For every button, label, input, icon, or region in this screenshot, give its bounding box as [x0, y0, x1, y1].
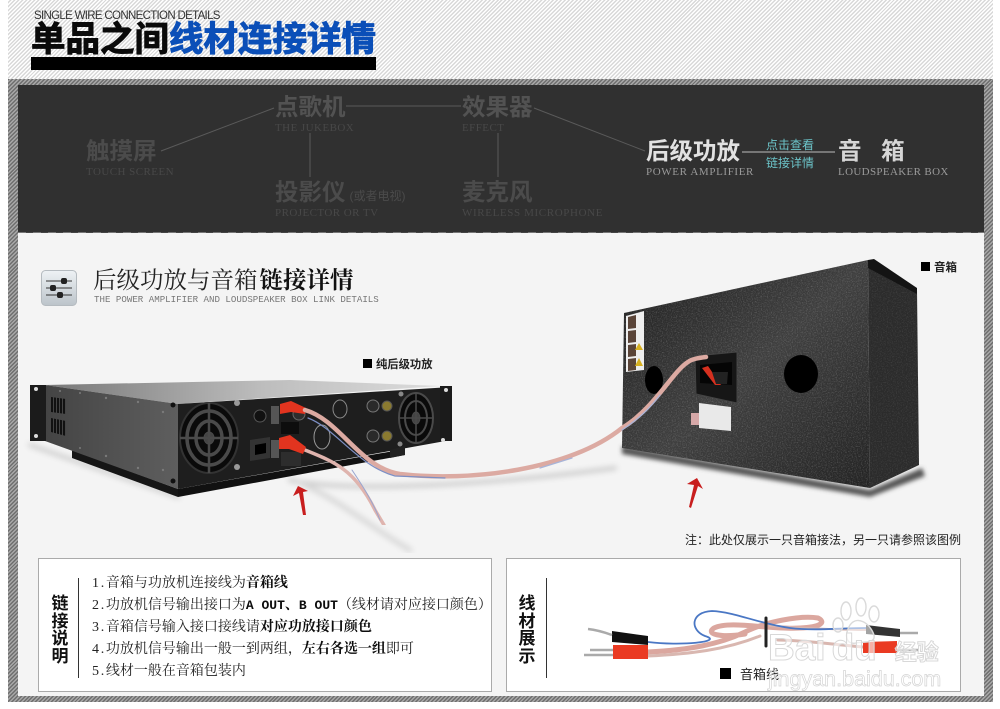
spec label — [699, 403, 731, 431]
node: jukebox — [275, 94, 354, 134]
speaker side — [868, 260, 919, 488]
node: microphone: 麦克风 — [462, 179, 532, 205]
amp back — [178, 387, 451, 489]
node: jukebox: 点歌机 — [275, 94, 346, 120]
cable caption: 音箱线 — [740, 667, 779, 682]
amp back details — [234, 392, 404, 470]
heading text: 后级功放与音箱链接详情 — [93, 268, 354, 294]
amp feet edge — [72, 450, 178, 497]
panel: connection notes — [38, 558, 492, 692]
note 4: 4.功放机信号输出一般一到两组，左右各选一组即可 — [92, 642, 414, 657]
node: effect: EFFECT — [462, 122, 504, 134]
amp side — [45, 385, 178, 489]
note 3: 3.音箱信号输入接口接线请对应功放接口颜色 — [92, 620, 372, 635]
section heading — [93, 268, 379, 305]
icon: sliders — [41, 270, 77, 306]
amp label: 纯后级功放 — [376, 359, 432, 371]
chain connector lines — [161, 106, 835, 177]
notes heading: 链接说明 — [52, 594, 68, 666]
link caption: 点击查看 — [766, 138, 814, 152]
node: jukebox: THE JUKEBOX — [275, 122, 354, 134]
amplifier photo — [30, 380, 452, 525]
node: touch screen: TOUCH SCREEN — [86, 166, 174, 178]
second amp wire — [305, 450, 384, 525]
arrow: amplifier — [293, 486, 308, 515]
note 1: 1.音箱与功放机连接线为音箱线 — [92, 576, 288, 591]
node: power amplifier: 后级功放 — [646, 138, 740, 164]
notes list — [92, 574, 492, 679]
warning sticker — [626, 311, 644, 372]
node: microphone: WIRELESS MICROPHONE — [462, 207, 603, 219]
cable caption — [720, 667, 779, 682]
node: projector: 投影仪 (或者电视) — [275, 179, 406, 205]
right fan — [399, 393, 433, 443]
node: projector — [275, 179, 406, 219]
main speaker cable — [302, 354, 708, 479]
header title: 单品之间线材连接详情 — [31, 21, 376, 59]
note 5: 5.线材一般在音箱包装内 — [92, 664, 246, 679]
speaker photo — [622, 259, 919, 488]
speaker label — [921, 261, 957, 274]
note: 注：此处仅展示一只音箱接法，另一只请参照该图例 — [685, 533, 961, 547]
node: loudspeaker box — [838, 138, 949, 178]
watermark logotype: Baidu 经验 — [768, 627, 939, 668]
terminal plate — [695, 352, 737, 403]
speaker label: 音箱 — [934, 262, 957, 274]
note 2: 2.功放机信号输出接口为A OUT、B OUT（线材请对应接口颜色） — [92, 598, 492, 613]
node: touch screen: 触摸屏 — [86, 138, 156, 164]
node: effect — [462, 94, 532, 134]
floor shadows — [28, 442, 928, 553]
display heading: 线材展示 — [518, 594, 536, 666]
panel: link details — [18, 233, 984, 696]
watermark paw — [832, 597, 880, 644]
cable photo — [584, 610, 918, 659]
link caption — [766, 138, 814, 170]
node: power amplifier — [646, 138, 754, 178]
red plugs — [280, 401, 306, 414]
panel: cable display — [506, 558, 961, 692]
link caption: 链接详情 — [766, 156, 814, 170]
speaker front — [622, 260, 870, 488]
heading english: THE POWER AMPLIFIER AND LOUDSPEAKER BOX LINK DETAILS — [94, 294, 379, 305]
node: power amplifier: POWER AMPLIFIER — [646, 166, 754, 178]
panel: connection chain — [18, 85, 984, 233]
node: touch screen — [86, 138, 174, 178]
top hatched header band — [8, 0, 993, 79]
speaker ports — [645, 366, 663, 394]
title underline bar — [31, 57, 376, 70]
header subtitle: SINGLE WIRE CONNECTION DETAILS — [34, 10, 220, 22]
node: projector: PROJECTOR OR TV — [275, 207, 379, 219]
node: loudspeaker box: LOUDSPEAKER BOX — [838, 166, 949, 178]
left fan — [180, 403, 238, 473]
watermark: Baidu — [767, 597, 941, 691]
amp top — [45, 380, 440, 404]
node: loudspeaker box: 音 箱 — [838, 138, 905, 164]
node: effect: 效果器 — [462, 94, 532, 120]
node: microphone — [462, 179, 603, 219]
left rack ear — [30, 385, 46, 441]
watermark url: jingyan.baidu.com — [768, 667, 941, 691]
arrow: speaker — [687, 478, 703, 508]
